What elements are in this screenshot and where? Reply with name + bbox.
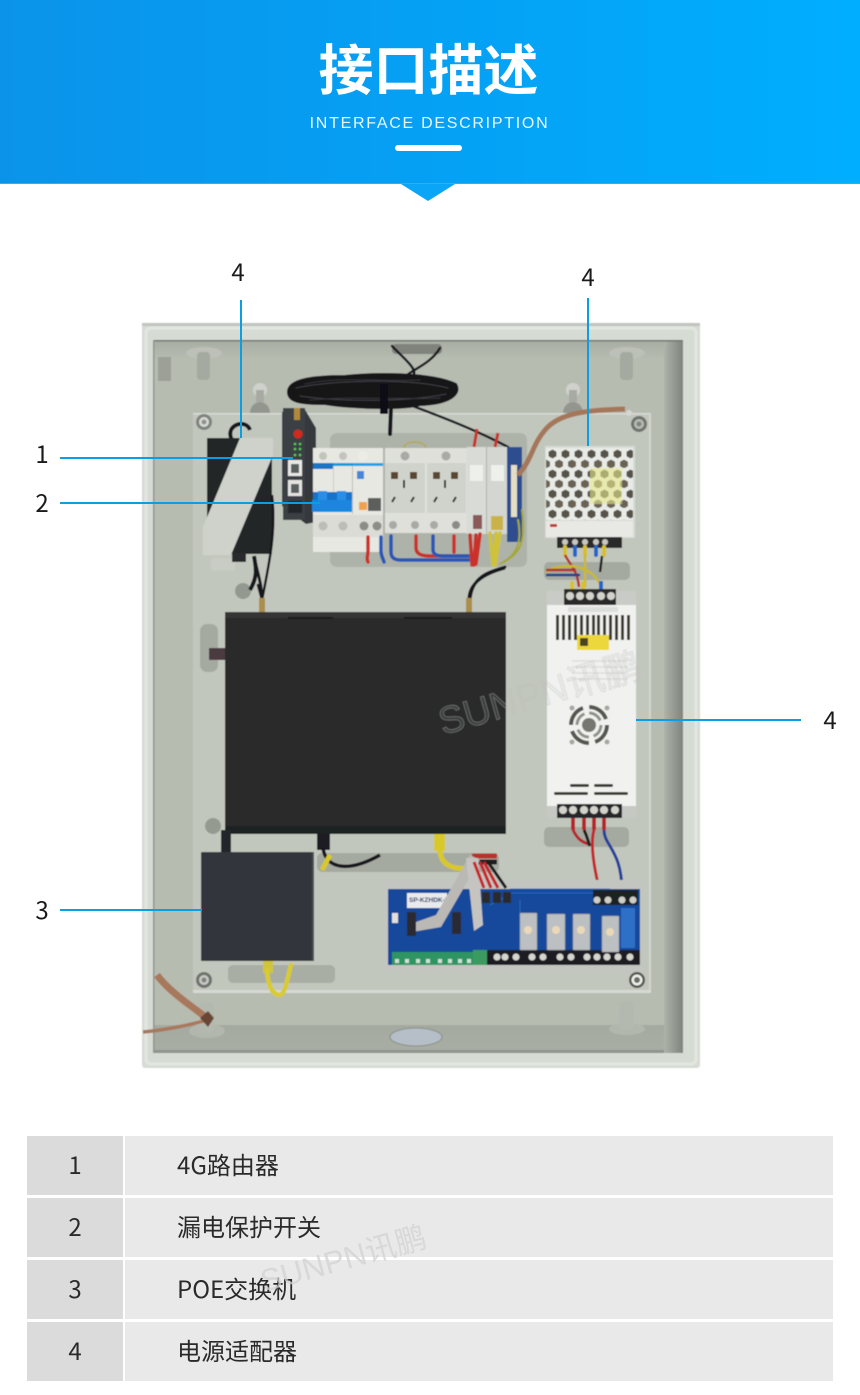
callout: 4 adapter top right: 4: [581, 258, 595, 293]
row 3: PoE switch: [27, 1260, 833, 1319]
standoffs: [186, 344, 645, 1038]
small PoE switch: [201, 852, 314, 995]
caution label: [577, 635, 609, 650]
4G router: [282, 408, 316, 524]
relay control board: SP-KZHDK-X: [409, 897, 450, 904]
small power adapter, label 4: [545, 446, 635, 590]
brass antenna connectors: [255, 560, 505, 612]
title underline bar: [395, 145, 462, 151]
row 4: power adapter: [27, 1322, 833, 1381]
plate screws: [196, 414, 647, 988]
callout: 3 PoE switch: 3: [35, 891, 49, 926]
terminal blocks and ground bar: [467, 429, 522, 542]
yellow ethernet cable: [263, 961, 291, 995]
row 3: PoE switch: 3: [68, 1270, 82, 1305]
cooling fan: [570, 706, 610, 744]
power sockets: [385, 442, 467, 533]
callout: 2 leakage switch: 2: [35, 484, 49, 519]
cables under switch: [221, 830, 497, 870]
leakage protection switch: [312, 448, 383, 552]
row 2: leakage protection switch: [27, 1198, 833, 1257]
callout: 1 router: 1: [35, 435, 49, 470]
mounting plate: [193, 413, 651, 993]
wiring under breakers: [258, 510, 523, 600]
row 2: leakage protection switch: 2: [68, 1208, 82, 1243]
power adapter with white strap, label 4: [203, 424, 273, 600]
watermark on photo: SUNPN讯鹏: [434, 646, 646, 744]
row 1: 4G router: 4G路由器: [177, 1146, 279, 1181]
plate cut-outs: [330, 433, 527, 567]
power wires: [474, 862, 506, 888]
copper ground strap: [518, 409, 632, 475]
leader lines and callout numbers: [35, 253, 837, 926]
large power supply, label 4: [547, 581, 636, 892]
callout: 4 power supply right: 4: [823, 701, 837, 736]
watermark on table: SUNPN讯鹏: [257, 1219, 430, 1299]
bottom cable gland and copper strap: [143, 975, 442, 1046]
row 1: 4G router: 1: [68, 1146, 82, 1181]
header pointer triangle: [401, 184, 455, 201]
green terminals: [392, 952, 473, 965]
row 1: 4G router: [27, 1136, 833, 1195]
callout: 4 adapter top left: 4: [231, 253, 245, 288]
relay control board: [386, 855, 642, 972]
header banner: [0, 0, 860, 201]
row 3: PoE switch: POE交换机: [177, 1270, 296, 1305]
row 4: power adapter: 电源适配器: [177, 1332, 297, 1367]
antenna cable coil: [288, 346, 508, 447]
subtitle: INTERFACE DESCRIPTION: [310, 115, 549, 132]
top output terminals: [593, 890, 638, 905]
legend table: [27, 1136, 833, 1381]
row 4: power adapter: 4: [68, 1332, 82, 1367]
black terminals: [487, 950, 640, 965]
row 2: leakage protection switch: 漏电保护开关: [177, 1208, 321, 1243]
PoE network switch (large): [225, 612, 506, 834]
scuffed paint on back wall: [158, 357, 171, 381]
product photo: control cabinet: [142, 323, 700, 1068]
relays: [520, 913, 619, 952]
ribbon cables: [412, 855, 480, 932]
cabinet outer frame: [142, 323, 700, 1068]
title: 接口描述: [318, 26, 539, 106]
keyhole brackets: [250, 383, 583, 413]
